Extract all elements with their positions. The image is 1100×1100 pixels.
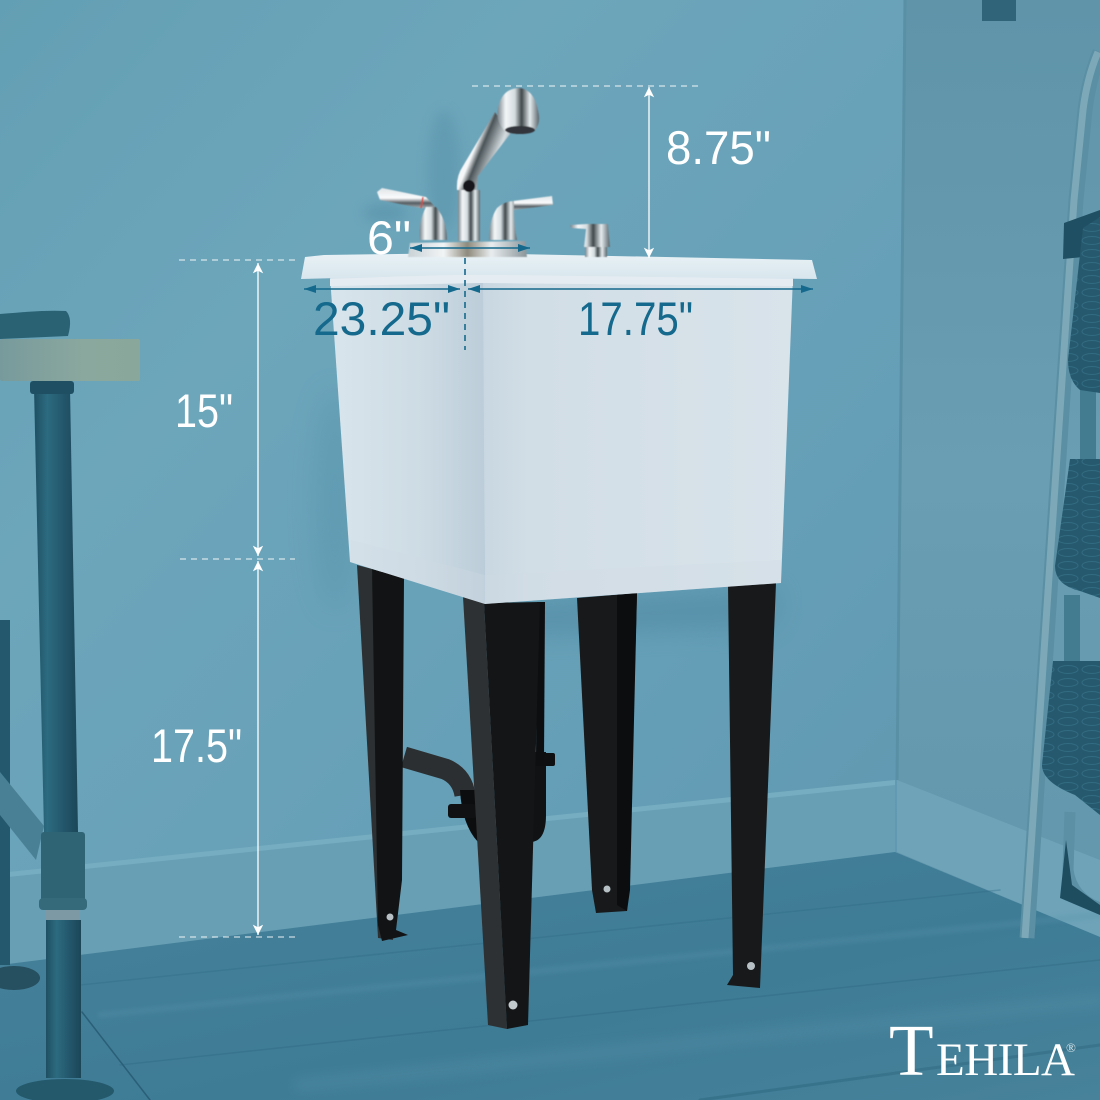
logo: Tehila: T [889,1010,934,1091]
pull-out spray body [457,112,510,190]
right handle lever [513,196,553,210]
guide: bottom of basin [180,558,295,560]
left wall [0,0,905,970]
sink leg: front [463,597,545,1029]
ladder rear rails [1072,390,1088,665]
ladder lower curved rail [1068,812,1100,908]
step 3 [1042,661,1100,815]
step 2 [1055,459,1100,598]
logo: Tehila: EHILA [936,1034,1075,1086]
ladder bracket [1063,210,1100,259]
label: leg height: 17.5" [151,719,242,772]
label: faucet spread: 6" [367,211,411,264]
basin rim [301,253,817,279]
ladder foot plate [1060,840,1100,915]
basin left face [330,276,485,604]
arrow: faucet spread [410,247,530,249]
sink basin [301,253,817,604]
basin rim shade [330,274,793,286]
stepladder at right [982,0,1100,938]
stool rear flange [0,966,40,990]
left handle red mark [421,197,423,208]
logo: Tehila: ® [1066,1040,1076,1055]
faucet [377,88,610,257]
label: depth: 23.25" [313,292,450,345]
floor plank streaks [80,890,1100,1100]
stool at left [0,311,140,1100]
spray button [463,180,475,192]
stool pipe collar [30,381,74,394]
arrow: leg height [257,561,259,935]
wall bracket [982,0,1016,21]
guide: top of sink [179,259,295,261]
drain pipe [404,752,555,842]
arrow: width [468,288,813,290]
soap dispenser stem [585,246,607,257]
stool pipe thread [46,910,80,920]
stool diagonal brace [0,772,44,860]
stool connector ring bottom [39,898,87,910]
shadows behind sink [315,110,780,635]
faucet riser [458,190,480,241]
deck plate [408,241,527,257]
label: basin height: 15" [175,384,233,437]
stool connector [41,832,85,904]
ladder rail [1027,52,1100,938]
ladder rail highlight [1025,52,1098,938]
stool rear leg [0,620,10,965]
stool flange [16,1079,114,1100]
arrow: depth [304,288,460,290]
stool lower pipe [46,920,81,1078]
guide: corner [464,258,466,350]
stool top plank [0,339,140,381]
dimension lines [179,86,813,937]
step 1 [1068,217,1100,393]
left handle lever [377,188,436,208]
basin bottom band [350,540,781,604]
label: width: 17.75" [578,292,693,345]
logo: Tehila [889,1010,1076,1091]
spray head [497,88,539,134]
floor [0,852,1100,1100]
label: faucet height: 8.75" [666,121,771,174]
basin right face [483,276,793,604]
towel on stool [0,311,70,339]
guide: top of faucet [472,85,698,87]
right handle [489,201,517,240]
soap dispenser cap [570,224,610,247]
sink leg: rear left [357,565,408,941]
left handle [420,207,447,240]
sink leg: right [727,583,776,988]
right baseboard [897,780,1100,937]
stool upper pipe [34,388,78,832]
dimension labels [151,121,771,772]
right wall [897,0,1100,950]
guide: floor [179,936,295,938]
arrow: faucet height [648,87,650,258]
sink leg: rear centre [577,593,637,913]
arrow: basin height [257,263,259,556]
left baseboard [8,780,895,965]
